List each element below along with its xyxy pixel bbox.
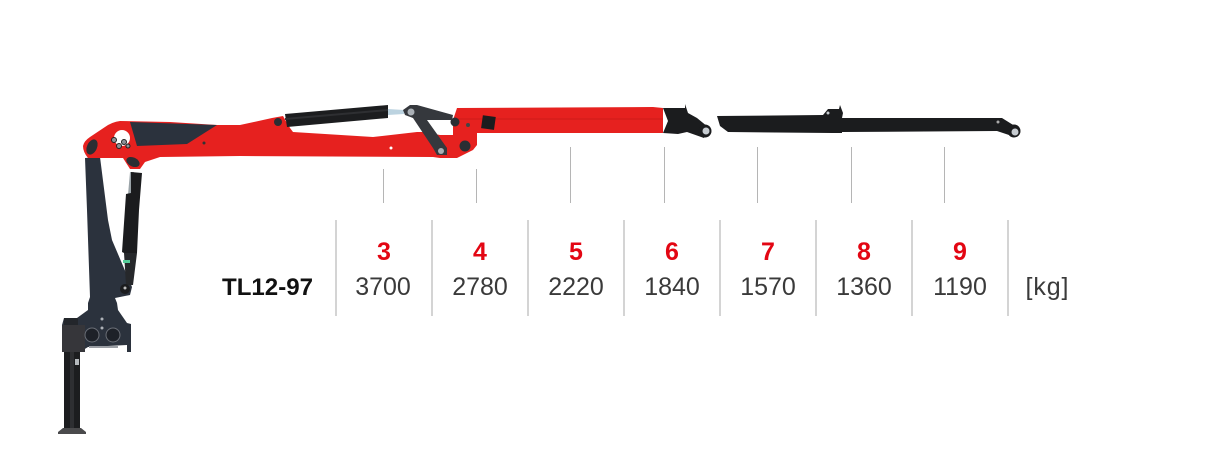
load values in kg: 2780	[452, 273, 508, 301]
linkage arm	[403, 105, 453, 155]
column	[62, 157, 132, 352]
load values in kg: 1360	[836, 273, 892, 301]
reach tick lines	[384, 147, 944, 203]
reach values in metres: 6	[665, 238, 679, 266]
boom cylinder	[285, 105, 404, 127]
reach values in metres: 4	[473, 238, 487, 266]
load values in kg: 1190	[933, 273, 987, 301]
main boom	[83, 107, 663, 169]
load values in kg: 1570	[740, 273, 796, 301]
post	[58, 352, 86, 434]
model name: TL12-97	[222, 274, 313, 301]
table column dividers	[336, 220, 1008, 316]
load values in kg	[355, 273, 987, 301]
crane illustration	[58, 104, 1020, 434]
lift cylinder	[120, 172, 142, 294]
reach values in metres: 9	[953, 238, 967, 266]
reach values in metres: 7	[761, 238, 775, 266]
unit label: [kg]	[1026, 273, 1068, 301]
reach values in metres	[377, 238, 967, 266]
reach values in metres: 3	[377, 238, 391, 266]
reach values in metres: 5	[569, 238, 583, 266]
reach values in metres: 8	[857, 238, 871, 266]
black extension	[717, 105, 1020, 138]
load values in kg: 1840	[644, 273, 700, 301]
load values in kg: 2220	[548, 273, 604, 301]
telescope head	[663, 104, 712, 138]
load values in kg: 3700	[355, 273, 411, 301]
